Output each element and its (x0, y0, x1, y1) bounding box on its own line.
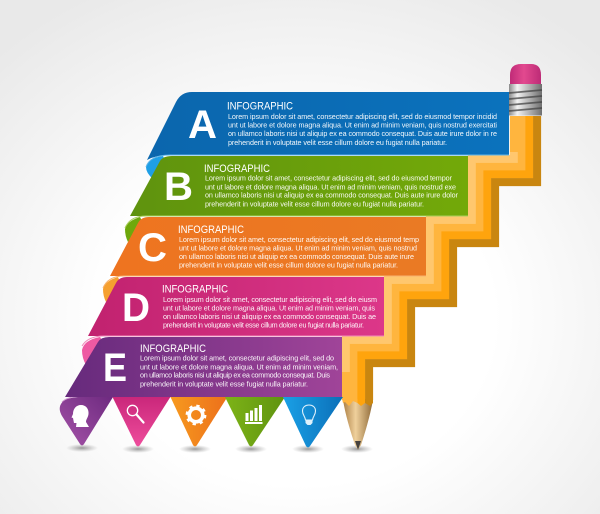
letter D: D (122, 286, 150, 330)
text block E: Lorem ipsum dolor sit amet, consectetur adipiscing elit, sed do (140, 354, 334, 362)
heading E: INFOGRAPHIC (140, 343, 206, 355)
heading A: INFOGRAPHIC (227, 100, 293, 112)
panel: band C (103, 217, 426, 288)
pencil body (342, 116, 537, 406)
fold: purple to pin (62, 396, 114, 402)
text block D: prehenderit in voluptate velit esse cillum dolore eu fugiat nulla pariatur. (163, 320, 364, 330)
letter C: C (138, 226, 167, 270)
text block E: prehenderit in voluptate velit esse fugiat nulla pariatur. (140, 380, 308, 388)
panel: band A (146, 92, 509, 167)
pin: magnifier (112, 396, 171, 446)
pin shadows (66, 444, 373, 453)
text block B: unt ut labore et dolore magna aliqua. Ut enim ad minim veniam, quis nostrud exe (205, 182, 456, 191)
text block A (228, 112, 497, 147)
text block B: Lorem ipsum dolor sit amet, consectetur adipiscing elit, sed do eiusmod tempor (205, 174, 453, 182)
text block B: on ullamco laboris nisi ut aliquip ex ea commodo consequat. Duis aute irure dolor (205, 191, 459, 200)
heading B: INFOGRAPHIC (204, 163, 270, 175)
text block D: on ullamco laboris nisi ut aliquip ex ea commodo consequat. Duis ae (163, 312, 376, 321)
panel: band B (125, 156, 468, 228)
text block E (140, 354, 338, 388)
text block B: prehenderit in voluptate velit esse cillum dolore eu fugiat nulla pariatur. (205, 200, 424, 208)
text block A: prehenderit in voluptate velit esse cillum dolore eu fugiat nulla pariatur. (228, 138, 447, 147)
panel: band E (65, 337, 342, 397)
pin: person (60, 397, 113, 446)
eraser (510, 64, 541, 86)
text block D: Lorem ipsum dolor sit amet, consectetur adipiscing elit, sed do eiusm (163, 295, 377, 304)
fold: green (125, 217, 142, 242)
stair-shaped pencil (342, 64, 542, 450)
heading C: INFOGRAPHIC (178, 224, 244, 236)
pin: bar chart (225, 397, 285, 446)
fold: orange (103, 277, 120, 302)
text block E: unt ut labore et dolore magna aliqua. Ut enim ad minim veniam, (140, 362, 338, 371)
text block B (205, 174, 459, 208)
text block A: on ullamco laboris nisi ut aliquip ex ea commodo consequat. Duis aute irure dolor in re (228, 129, 497, 138)
text block C (179, 235, 419, 270)
pencil tip (343, 400, 373, 450)
heading D: INFOGRAPHIC (162, 284, 228, 296)
text block C: Lorem ipsum dolor sit amet, consectetur adipiscing elit, sed do eiusmod temp (179, 235, 419, 244)
letter E: E (103, 346, 127, 390)
text block C: on ullamco laboris nisi ut aliquip ex ea commodo consequat. Duis aute irure (179, 252, 414, 261)
text block D: unt ut labore et dolore magna aliqua. Ut enim ad minim veniam, quis (163, 304, 375, 312)
metal ferrule (509, 84, 542, 116)
text block A: Lorem ipsum dolor sit amet, consectetur adipiscing elit, sed do eiusmod tempor incidid (228, 112, 497, 121)
fold: pink (82, 337, 102, 365)
letter B: B (164, 165, 193, 209)
panel: band D (82, 277, 384, 346)
text block C: unt ut labore et dolore magna aliqua. Ut enim ad minim veniam, quis nostrud (179, 244, 417, 252)
fold: light blue (146, 156, 165, 179)
text block E: on ullamco laboris nisi ut aliquip ex ea commodo consequat. Duis (140, 371, 330, 380)
text block D (163, 295, 377, 330)
pin: light bulb (283, 397, 343, 448)
text block A: unt ut labore et dolore magna aliqua. Ut enim ad minim veniam, quis nostrud exercitati (228, 121, 497, 130)
text block C: prehenderit in voluptate velit esse cillum dolore eu fugiat nulla pariatur. (179, 260, 398, 270)
pins row (60, 396, 343, 448)
letter A: A (188, 103, 217, 147)
pin: gear (170, 396, 228, 446)
